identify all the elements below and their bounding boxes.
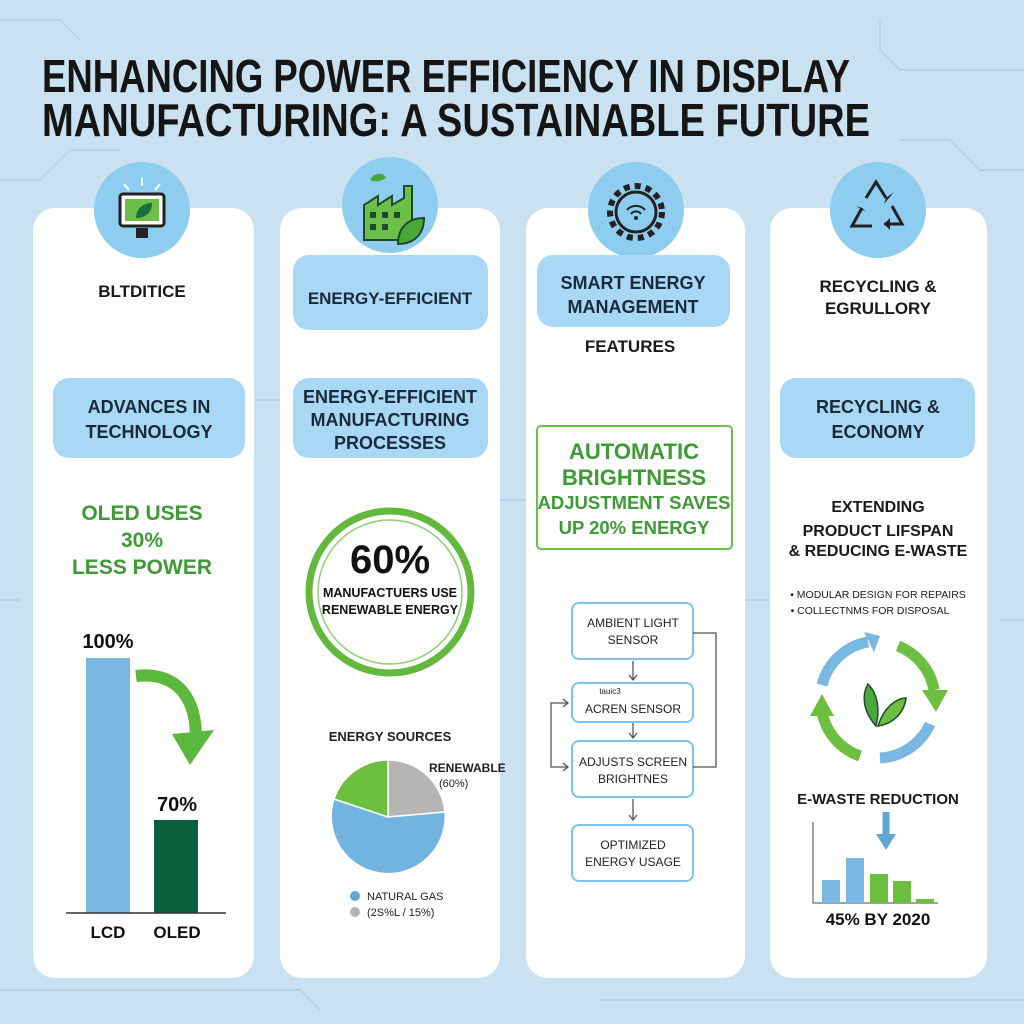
- pie chart: energy sources: [329, 729, 506, 919]
- callout: automatic brightness: BRIGHTNESS: [562, 465, 706, 490]
- panel: manufacturing: [280, 157, 506, 978]
- pill: recycling economy: RECYCLING &: [816, 397, 940, 417]
- pill: smart energy management: SMART ENERGY: [560, 273, 706, 293]
- text block: extending lifespan: • COLLECTNMS FOR DISPOSAL: [791, 605, 950, 617]
- flowchart: OPTIMIZED: [600, 838, 666, 852]
- flowchart: ADJUSTS SCREEN: [579, 755, 687, 769]
- pie chart: energy sources: RENEWABLE: [429, 761, 506, 775]
- pill: energy-efficient: [293, 255, 488, 330]
- icon: gear with wifi: [588, 162, 684, 258]
- text block: extending lifespan: • MODULAR DESIGN FOR REPAIRS: [790, 589, 966, 601]
- chart: e-waste reduction: [797, 791, 959, 929]
- pill: recycling economy: ECONOMY: [831, 422, 925, 442]
- chart: e-waste reduction: E-WASTE REDUCTION: [797, 791, 959, 808]
- pill: manufacturing processes: PROCESSES: [334, 433, 446, 453]
- callout: automatic brightness: UP 20% ENERGY: [559, 517, 710, 538]
- pill: smart energy management: [537, 255, 730, 327]
- stat text: 30%: [121, 529, 163, 552]
- pill: manufacturing processes: ENERGY-EFFICIENT: [303, 387, 477, 407]
- text block: extending lifespan: EXTENDING: [831, 499, 925, 516]
- panel: recycling: EGRULLORY: [825, 299, 932, 318]
- flowchart: [551, 603, 716, 881]
- pill: advances in technology: [53, 378, 245, 458]
- flowchart: ENERGY USAGE: [585, 855, 681, 869]
- bar chart LCD vs OLED: LCD: [91, 923, 125, 942]
- bar chart LCD vs OLED: OLED: [153, 923, 201, 942]
- flowchart: SENSOR: [608, 633, 659, 647]
- pie chart: energy sources: ENERGY SOURCES: [329, 729, 452, 744]
- callout: automatic brightness: ADJUSTMENT SAVES: [538, 492, 730, 513]
- icon: factory: [342, 157, 438, 253]
- heading: RECYCLING &: [819, 277, 937, 296]
- icon: circular arrows with leaf: [810, 632, 948, 758]
- text block: extending lifespan: [789, 499, 968, 617]
- icon: recycle symbol: [830, 162, 926, 258]
- flowchart: ACREN SENSOR: [585, 702, 681, 716]
- bar chart LCD vs OLED: 70%: [157, 794, 197, 816]
- pill: smart energy management: MANAGEMENT: [568, 297, 698, 317]
- flowchart: AMBIENT LIGHT: [587, 616, 680, 630]
- pie chart: energy sources: (2S%L / 15%): [367, 907, 434, 919]
- pill: recycling economy: [780, 378, 975, 458]
- bar chart LCD vs OLED: 100%: [82, 631, 134, 653]
- pie chart: energy sources: NATURAL GAS: [367, 891, 443, 903]
- pill: advances in technology: ADVANCES IN: [88, 397, 210, 417]
- chart: e-waste reduction: 45% BY 2020: [826, 910, 930, 929]
- stat text: [72, 502, 212, 579]
- title: [42, 50, 870, 146]
- flowchart: BRIGHTNES: [598, 772, 668, 786]
- panel: technology: [33, 162, 254, 978]
- stat text: LESS POWER: [72, 556, 212, 579]
- pill: energy-efficient: ENERGY-EFFICIENT: [308, 289, 473, 308]
- bar chart LCD vs OLED: [66, 631, 226, 942]
- panel: smart energy management: [526, 162, 745, 978]
- pill: advances in technology: TECHNOLOGY: [85, 422, 213, 442]
- text block: extending lifespan: & REDUCING E-WASTE: [789, 543, 968, 560]
- flowchart: tauic3: [599, 687, 621, 696]
- ring stat 60%: 60%: [350, 538, 430, 582]
- panel: recycling: [770, 162, 987, 978]
- pie chart: energy sources: (60%): [439, 778, 468, 790]
- ring stat 60%: MANUFACTUERS USE: [323, 586, 457, 600]
- ring stat 60%: RENEWABLE ENERGY: [322, 603, 459, 617]
- callout: automatic brightness: [537, 426, 732, 549]
- icon: display with leaf: [94, 162, 190, 258]
- text block: extending lifespan: PRODUCT LIFSPAN: [803, 523, 953, 540]
- pill: manufacturing processes: MANUFACTURING: [310, 410, 470, 430]
- heading: BLTDITICE: [98, 282, 186, 301]
- callout: automatic brightness: AUTOMATIC: [569, 439, 699, 464]
- pill: manufacturing processes: [293, 378, 488, 458]
- heading: features: FEATURES: [585, 337, 675, 356]
- arrow: decrease: [136, 675, 214, 765]
- title: MANUFACTURING: A SUSTAINABLE FUTURE: [42, 94, 870, 146]
- stat text: OLED USES: [81, 502, 203, 525]
- ring stat 60%: [309, 511, 471, 673]
